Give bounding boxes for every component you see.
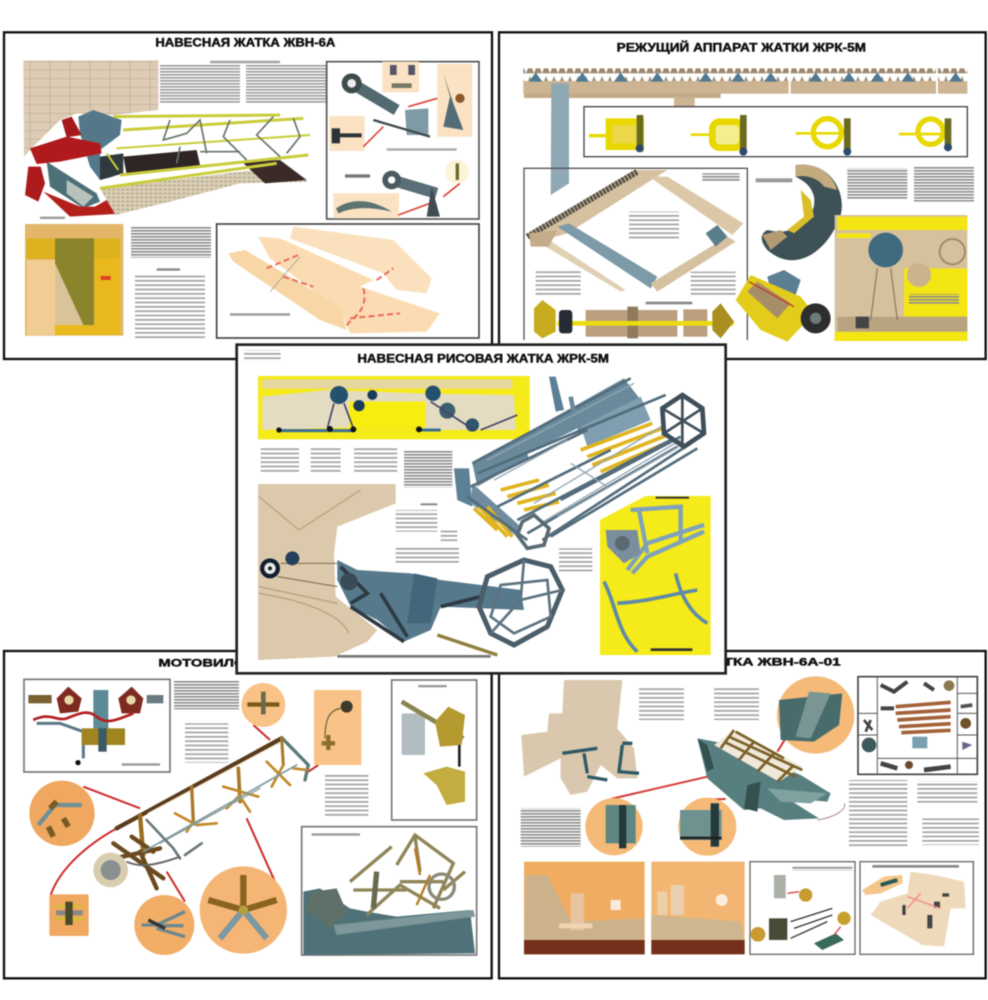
poster 2 text block — [847, 167, 974, 202]
inset circle: side panel — [777, 676, 854, 754]
panel: yellow engine detail — [835, 215, 967, 341]
main reel assembly — [454, 377, 704, 548]
upper arm part — [332, 65, 465, 143]
header caption — [40, 217, 65, 219]
poster 1: mounted header ZhVN-6A — [4, 32, 492, 359]
inset circle: top hub — [241, 683, 285, 727]
panel: drive parts — [750, 862, 855, 954]
inset panel: spring — [314, 690, 361, 765]
poster 3 title: НАВЕСНАЯ РИСОВАЯ ЖАТКА ЖРК-5М — [357, 352, 609, 366]
peach insets — [329, 62, 472, 218]
poster 3: rice header ZhRK-5M (centre, on top) — [237, 345, 726, 673]
inset circle: left hub — [29, 781, 95, 846]
vertical blue knife head — [551, 83, 569, 195]
red connector lines — [363, 98, 460, 215]
yellow panel caption — [909, 294, 959, 304]
panel: yellow frame details — [600, 496, 711, 655]
poster 5: header ZhVN-6A-01 — [499, 651, 986, 978]
panel: reel drive section — [24, 679, 170, 772]
panel: peach adjustment right — [651, 862, 745, 954]
poster 1 frame — [4, 32, 492, 359]
publisher tag — [244, 350, 281, 362]
poster 1 title: НАВЕСНАЯ ЖАТКА ЖВН-6А — [155, 36, 336, 50]
panel: soil map — [25, 224, 123, 336]
poster 4 frame — [4, 651, 492, 978]
header illustration — [25, 110, 310, 217]
reel assembly — [93, 738, 308, 888]
poster 1 lower text and spec table — [131, 226, 211, 339]
panel: peach adjustment left — [524, 862, 645, 954]
inset circle: left section — [585, 798, 643, 855]
panel: bearing assembly — [392, 680, 477, 820]
wheel cutaway — [762, 165, 842, 260]
grid of parts — [858, 677, 977, 774]
panel: yellow clamp row — [584, 107, 967, 157]
panel: photo of reel on header — [302, 827, 477, 955]
tractor silhouette — [521, 680, 639, 795]
cutter bar — [523, 68, 967, 195]
panel: frame parts — [860, 862, 973, 954]
inset panel: clamp — [49, 894, 89, 936]
panel: header details — [327, 62, 479, 219]
poster 3 frame — [237, 345, 726, 673]
red leader lines — [51, 725, 318, 902]
poster 3 legends and text — [261, 447, 592, 572]
poster 2: cutter bar ZhRK-5M — [499, 32, 986, 359]
poster 4 title: МОТОВИЛО ЖАТКИ — [158, 657, 302, 669]
tractor beige silhouette — [258, 484, 396, 660]
beige tractor background — [23, 61, 158, 157]
lower arm part — [336, 148, 469, 217]
panel: yellow kinematic scheme — [258, 376, 530, 439]
panel: lower assembly drawing — [217, 224, 479, 338]
poster 5 frame — [499, 651, 986, 978]
inset circle: fork — [134, 895, 194, 955]
poster 2 frame — [499, 32, 986, 359]
panel: cutter frame drawing — [524, 83, 747, 340]
inset circle: right section — [678, 798, 736, 856]
gearbox — [736, 270, 831, 342]
header body illustration — [697, 730, 845, 820]
side reel arm — [337, 560, 562, 655]
poster 1 text block — [160, 61, 326, 103]
red leader lines — [611, 738, 786, 800]
poster 4: reel — [4, 651, 492, 978]
poster 2 title: РЕЖУЩИЙ АППАРАТ ЖАТКИ ЖРК-5М — [617, 40, 866, 55]
poster 5 title: НАВЕСНАЯ ЖАТКА ЖВН-6А-01 — [607, 657, 841, 669]
bottom caption — [337, 655, 491, 658]
bottom section drawing — [534, 300, 734, 338]
poster 4 text blocks — [174, 681, 368, 817]
inset circle: five-arm hub — [200, 866, 287, 954]
poster 5 text blocks — [521, 687, 979, 848]
